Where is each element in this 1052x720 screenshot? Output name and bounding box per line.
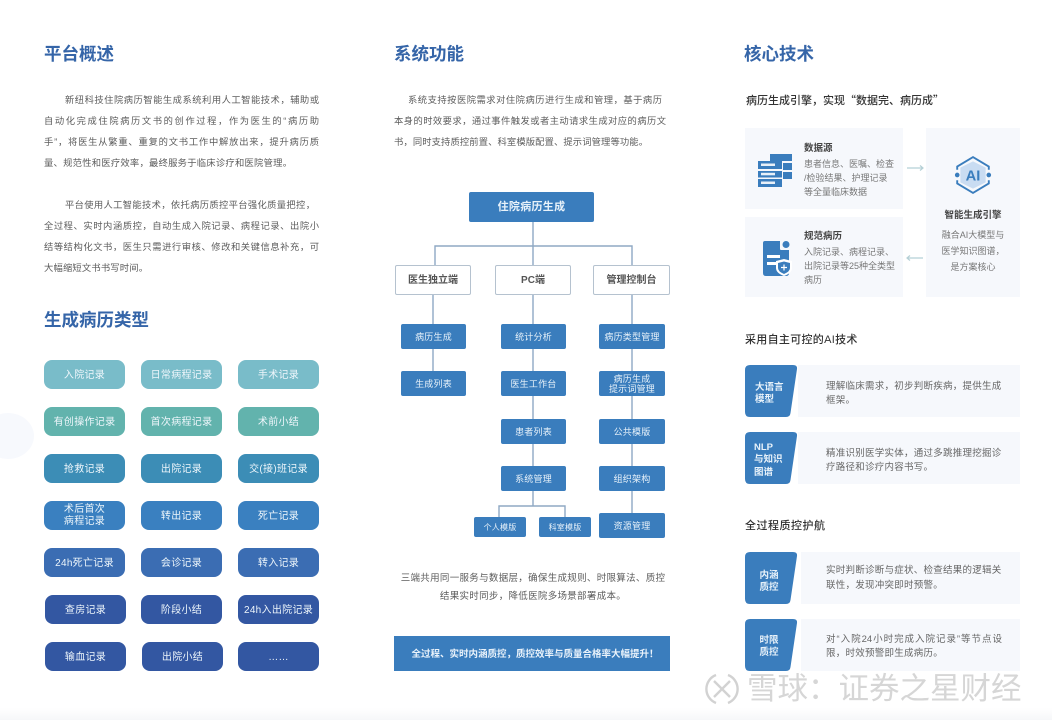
subheading: engine: 病历生成引擎，实现“数据完、病历成” <box>746 92 944 108</box>
watermark text: 雪球：证券之星财经 <box>747 672 1022 706</box>
panel: full-process quality control <box>745 520 1020 671</box>
engine title: 智能生成引擎 <box>944 210 1002 221</box>
branch: admin console <box>593 265 670 295</box>
row: large language model <box>745 365 1020 417</box>
card text: 出院记录等25种全类型 <box>804 261 895 271</box>
pill row 5 <box>44 548 319 577</box>
card: intelligent engine <box>926 128 1020 297</box>
text block: overview paragraph one <box>44 95 319 168</box>
description: 理解临床需求，初步判断疾病，提供生成 <box>826 381 1002 392</box>
root node <box>469 192 594 222</box>
tag: LLM: 模型 <box>755 393 775 405</box>
node: prompt management <box>599 371 665 396</box>
icon: watermark logo <box>705 674 739 704</box>
subheading: AI technology: 采用自主可控的AI技术 <box>745 334 858 346</box>
card text <box>804 247 895 285</box>
node: doctor workstation: 医生工作台 <box>510 379 556 389</box>
engine text: 医学知识图谱， <box>941 246 1004 256</box>
node: system management: 系统管理 <box>515 474 552 484</box>
panel: autonomous AI technology <box>745 334 1020 484</box>
tag: LLM: 大语言 <box>755 381 784 393</box>
node: department template: 科室模版 <box>549 523 581 532</box>
node: organization <box>599 466 665 491</box>
arrow: to engine <box>907 165 924 171</box>
pill row 3: 交(接)班记录 <box>249 464 308 475</box>
decorative bottom fade <box>0 708 1052 720</box>
pill row 1: 入院记录 <box>64 370 105 381</box>
description <box>826 564 1002 591</box>
callout banner: 全过程、实时内涵质控，质控效率与质量合格率大幅提升！ <box>411 649 658 660</box>
panel: generation engine <box>745 92 1020 297</box>
pill row 6 <box>45 595 319 624</box>
tag: content QC <box>745 552 798 604</box>
pill row 4: 转出记录 <box>161 511 202 522</box>
engine text <box>941 230 1004 272</box>
card title: 数据源 <box>804 143 833 154</box>
pill row 6: 24h入出院记录 <box>244 605 313 616</box>
pill row 3 <box>44 454 319 483</box>
pill row 2: 有创操作记录 <box>54 417 115 428</box>
text block: shared data layer note: 三端共用同一服务与数据层，确保生成规则、时限算法、质控 <box>401 573 665 584</box>
pill row 5: 会诊记录 <box>161 558 202 569</box>
pill row 6: 阶段小结 <box>161 605 202 616</box>
node: statistics: 统计分析 <box>515 332 552 342</box>
description: 实时判断诊断与症状、检查结果的逻辑关 <box>826 565 1002 576</box>
description <box>826 448 1002 473</box>
icon: document shield <box>763 241 792 276</box>
pill row 7: 输血记录 <box>65 652 106 663</box>
node: record generation <box>401 324 466 349</box>
node: record type management <box>599 324 665 349</box>
heading: record types: 生成病历类型 <box>44 310 149 330</box>
card title: 规范病历 <box>804 231 842 242</box>
description: 限，时效预警即生成病历。 <box>826 648 943 659</box>
text block: overview paragraph one: 量、规范性和医疗效率，最终服务于临床诊疗和医院管理。 <box>44 158 292 168</box>
org chart: inpatient record generation <box>395 192 670 538</box>
heading: core technology: 核心技术 <box>744 44 814 64</box>
pill row 2: 首次病程记录 <box>151 417 212 428</box>
tag: NLP <box>745 432 798 484</box>
node: public template: 公共模版 <box>614 427 650 437</box>
card text: 等全量临床数据 <box>804 187 867 197</box>
text block: shared data layer note <box>401 572 665 602</box>
pill row 6: 查房记录 <box>65 605 106 616</box>
tag: content QC: 内涵 <box>759 569 779 581</box>
text block: overview paragraph two: 结等结构化文书，医生只需进行审核、修改和关键信息补充，可 <box>44 242 319 252</box>
pill row 1: 手术记录 <box>258 370 299 381</box>
text block: system functions intro <box>394 95 666 147</box>
node: organization: 组织架构 <box>614 474 650 484</box>
pill row 7: …… <box>268 652 289 663</box>
description <box>826 634 1002 659</box>
heading: platform overview: 平台概述 <box>44 44 114 64</box>
node: patient list: 患者列表 <box>515 427 552 437</box>
card text: 入院记录、病程记录、 <box>804 247 894 257</box>
text block: system functions intro: 系统支持按医院需求对住院病历进行生成和管理，基于病历 <box>408 95 662 105</box>
pill row 7 <box>45 642 319 671</box>
description: 联性，发现冲突即时预警。 <box>826 580 943 591</box>
tag: content QC: 质控 <box>759 581 779 593</box>
node: prompt management: 提示词管理 <box>609 384 655 394</box>
card text: /检验结果、护理记录 <box>804 173 888 183</box>
card: data sources <box>745 128 903 209</box>
branch: PC client: PC端 <box>521 275 545 286</box>
engine text: 是方案核心 <box>950 262 996 272</box>
text block: overview paragraph two <box>44 200 319 273</box>
text block: overview paragraph one: 手”，将医生从繁重、重复的文书工作中解放出来，提升病历质 <box>44 137 319 147</box>
text block: overview paragraph one: 新纽科技住院病历智能生成系统利用人工智能技术，辅助或 <box>65 95 319 105</box>
callout banner <box>394 636 670 671</box>
tag: NLP: 与知识 <box>754 453 783 465</box>
pill row 4: 死亡记录 <box>258 511 299 522</box>
node: patient list <box>501 419 566 444</box>
description: 疗路径和诊疗内容书写。 <box>826 462 933 473</box>
node: personal template: 个人模版 <box>484 523 516 532</box>
node: system management <box>501 466 566 491</box>
decorative faint circle <box>0 413 34 459</box>
heading: system functions: 系统功能 <box>394 44 464 64</box>
row: NLP and knowledge graph <box>745 432 1020 484</box>
node: personal template <box>474 517 526 537</box>
node: record generation: 病历生成 <box>415 332 452 342</box>
branch: doctor client <box>395 265 471 295</box>
engine text: 融合AI大模型与 <box>942 230 1004 240</box>
row: content quality control <box>745 552 1020 604</box>
panel: platform overview <box>44 44 319 273</box>
branch: admin console: 管理控制台 <box>606 275 656 286</box>
node: department template <box>539 517 591 537</box>
pill row 2: 术前小结 <box>258 417 299 428</box>
node: prompt management: 病历生成 <box>614 374 650 384</box>
pill row 5: 24h死亡记录 <box>55 558 114 569</box>
description: 精准识别医学实体，通过多跳推理挖掘诊 <box>826 448 1002 459</box>
text block: overview paragraph one: 自动化完成住院病历文书的创作过程，作为医生的“病历助 <box>44 116 319 126</box>
text block: overview paragraph two: 大幅缩短文书书写时间。 <box>44 263 148 273</box>
node: public template <box>599 419 665 444</box>
tag: NLP: 图谱 <box>754 466 774 478</box>
icon: AI hexagon <box>954 156 992 194</box>
arrow: from engine <box>906 255 923 261</box>
tag: time-limit QC: 时限 <box>759 634 779 646</box>
pill row 3: 抢救记录 <box>64 464 105 475</box>
text block: system functions intro: 本身的时效要求，通过事件触发或者主动请求生成对应的病历文 <box>394 116 666 126</box>
text block: system functions intro: 书，同时支持质控前置、科室模版配置、提示词管理等功能。 <box>394 137 648 147</box>
pill row 4: 术后首次 <box>64 504 105 515</box>
icon: database stack <box>758 154 792 187</box>
node: record type management: 病历类型管理 <box>604 332 660 342</box>
node: doctor workstation <box>501 371 566 396</box>
panel: record type pills <box>44 360 319 671</box>
branch: doctor client: 医生独立端 <box>408 275 458 286</box>
root node: 住院病历生成 <box>498 201 565 213</box>
text block: shared data layer note: 结果实时同步，降低医院多场景部署成本。 <box>440 591 626 602</box>
subheading: quality control: 全过程质控护航 <box>745 520 826 532</box>
row: time-limit quality control <box>745 619 1020 671</box>
tag: time-limit QC <box>745 619 798 671</box>
node: generation list <box>401 371 466 396</box>
tag: time-limit QC: 质控 <box>759 646 779 658</box>
pill row 1: 日常病程记录 <box>151 370 212 381</box>
tag: LLM <box>745 365 798 417</box>
node: resource management: 资源管理 <box>614 521 650 531</box>
text block: overview paragraph two: 全过程、实时内涵质控，自动生成入院记录、病程记录、出院小 <box>44 221 319 231</box>
node: statistics <box>501 324 566 349</box>
card text: 患者信息、医嘱、检查 <box>804 159 894 169</box>
description: 框架。 <box>826 395 855 406</box>
card: standard records <box>745 217 903 297</box>
watermark <box>705 672 1022 706</box>
node: generation list: 生成列表 <box>415 379 452 389</box>
pill row 5: 转入记录 <box>258 558 299 569</box>
pill row 1 <box>44 360 319 389</box>
pill row 3: 出院记录 <box>161 464 202 475</box>
pill row 2 <box>44 407 319 436</box>
text block: overview paragraph two: 平台使用人工智能技术，依托病历质控平台强化质量把控， <box>65 200 315 210</box>
node: resource management <box>599 513 665 538</box>
description <box>826 380 1002 406</box>
card text <box>804 159 894 197</box>
branch: PC client <box>495 265 571 295</box>
card text: 病历 <box>804 275 822 285</box>
description: 对“入院24小时完成入院记录”等节点设 <box>826 634 1002 645</box>
tag: NLP: NLP <box>754 442 774 453</box>
pill row 4 <box>44 501 319 530</box>
pill row 4: 病程记录 <box>64 516 105 527</box>
icon: AI hexagon: AI <box>966 168 980 184</box>
pill row 7: 出院小结 <box>162 652 203 663</box>
